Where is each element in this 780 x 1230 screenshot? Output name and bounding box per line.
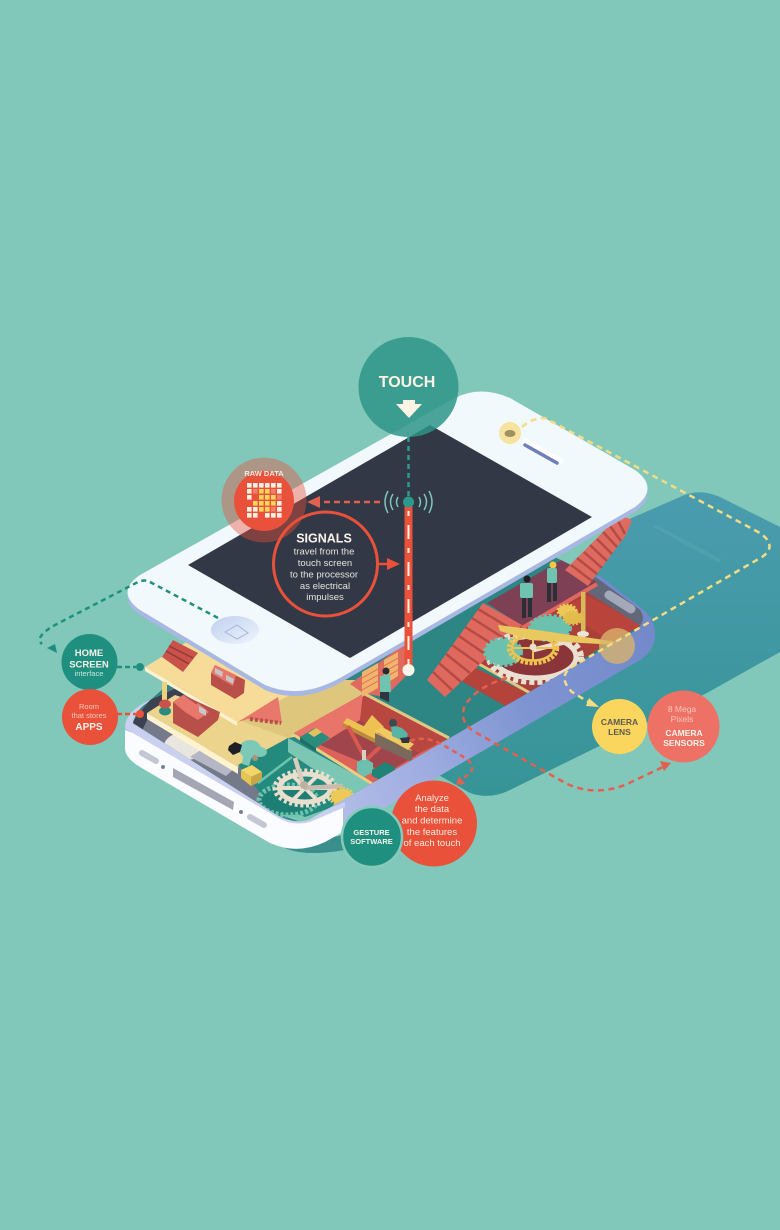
gesture software label: GESTURE [353, 828, 390, 837]
camera lens label: CAMERA [601, 717, 638, 727]
apps label: Room [79, 702, 99, 711]
teal gear [258, 757, 317, 815]
right pit [481, 592, 622, 692]
home screen label [62, 634, 118, 690]
raw data badge [222, 458, 306, 542]
plate edge [128, 396, 648, 696]
screen [188, 425, 592, 658]
raw data arrow [307, 496, 380, 508]
small yellow gears [558, 605, 582, 624]
touch label [358, 337, 458, 437]
camera sensors label: CAMERA [665, 728, 703, 738]
upper floor slab [145, 625, 320, 726]
machine boxes [375, 733, 412, 762]
lower staircase [427, 603, 522, 697]
yellow lever [498, 625, 618, 645]
signal node [403, 496, 414, 508]
camera sensors label: 8 Mega [668, 704, 696, 714]
home screen label: SCREEN [69, 660, 109, 670]
shadow under phone corner [280, 835, 345, 853]
pink ramp stairs [238, 697, 282, 723]
battery disc [164, 732, 208, 760]
apps connector [117, 710, 144, 718]
sawtooth white gear [490, 633, 585, 681]
camera lens label [592, 699, 647, 754]
apps label [62, 689, 118, 745]
speaker grille right [250, 817, 264, 825]
dark inner rim left [133, 686, 276, 814]
rim highlight [125, 701, 345, 824]
small yellow gear [331, 789, 353, 805]
home screen label: HOME [75, 648, 103, 659]
signals arrow [378, 558, 400, 570]
white front face [125, 730, 343, 849]
room pit [294, 694, 449, 785]
room dark floor [320, 720, 420, 773]
white cog [275, 758, 343, 805]
tan floor [242, 680, 362, 738]
shadow detail strip [653, 525, 722, 562]
worker by the wall [380, 668, 391, 702]
lower cabinets [173, 695, 220, 737]
workers on upper floor [520, 562, 557, 618]
camera sensors label: Pixels [671, 714, 693, 724]
room edge left [294, 735, 374, 785]
central louvred wall [350, 646, 406, 697]
yellow dashed route: camera [522, 418, 770, 707]
gesture software label [342, 807, 402, 867]
data grid [247, 483, 282, 518]
front camera [499, 422, 521, 444]
lower floor slab [147, 695, 300, 767]
support column [159, 682, 171, 716]
green dashed route: home screen [40, 580, 218, 653]
upper staircase [565, 515, 632, 586]
camera lens highlight [599, 628, 635, 664]
pink floor edge [522, 584, 597, 628]
signals callout [274, 512, 378, 616]
camera sensors label [648, 690, 720, 762]
analyze label: the features [407, 827, 457, 838]
machine bench [343, 715, 414, 781]
signals callout: SIGNALS [296, 532, 352, 546]
analyze label: of each touch [403, 838, 461, 849]
camera lens label: LENS [608, 727, 631, 737]
touch label: TOUCH [379, 374, 435, 391]
touch plate [128, 392, 648, 696]
home button [211, 616, 259, 644]
analyze label: Analyze [415, 793, 449, 804]
room edge right [363, 693, 449, 738]
red dashed route: analysis [410, 739, 472, 785]
analyze label [391, 780, 477, 866]
phone interior [133, 558, 643, 822]
screw hole left [161, 765, 165, 769]
home screen label: interface [75, 669, 103, 678]
room left wall [294, 694, 363, 745]
raw data badge: RAW DATA [244, 469, 284, 478]
touch signal stem [385, 437, 432, 676]
gray camera housing [587, 578, 643, 626]
signals callout: travel from the [294, 546, 354, 558]
phone shadow [430, 492, 780, 796]
pit edge [478, 664, 530, 694]
mint base [357, 758, 373, 777]
yellow post [577, 592, 589, 637]
gesture software label: SOFTWARE [350, 837, 393, 846]
charging port [173, 768, 234, 810]
body outer shell [125, 576, 655, 849]
upper staircase block [162, 640, 198, 672]
analyze label: and determine [402, 816, 462, 826]
signal waves [385, 491, 432, 513]
teal floor [133, 558, 643, 822]
red dashed route: camera sensors [463, 678, 671, 790]
teal and yellow boxes [300, 728, 330, 752]
mint floor [280, 738, 374, 825]
plate top [128, 392, 648, 691]
signals callout: to the processor [290, 570, 358, 580]
camera sensors label: SENSORS [663, 738, 705, 748]
pit back wall [570, 595, 641, 642]
dark maroon upper floor [487, 555, 597, 627]
electrical impulse bar [402, 505, 414, 676]
signals callout: impulses [306, 592, 344, 603]
mint gear left [485, 639, 521, 665]
speaker slot [525, 442, 561, 463]
home screen connector [117, 663, 144, 671]
apps label: that stores [71, 711, 107, 720]
mint gear top [530, 616, 570, 640]
worker [389, 719, 397, 727]
signals callout: touch screen [298, 558, 352, 569]
apps label: APPS [75, 722, 103, 733]
touch arrow [396, 400, 422, 418]
pit front block [463, 668, 528, 706]
screw hole right [239, 810, 243, 814]
speaker grille left [142, 753, 156, 761]
upper cabinets [211, 665, 245, 699]
gear plate [238, 738, 340, 817]
analyze label: the data [415, 804, 450, 815]
mint figure [228, 740, 267, 766]
teal block [372, 762, 395, 781]
phone body [125, 576, 655, 849]
yellow box [241, 765, 262, 786]
room right wall [360, 694, 449, 753]
chair [364, 715, 384, 734]
yellow gear [509, 633, 557, 663]
signals callout: as electrical [300, 581, 350, 592]
